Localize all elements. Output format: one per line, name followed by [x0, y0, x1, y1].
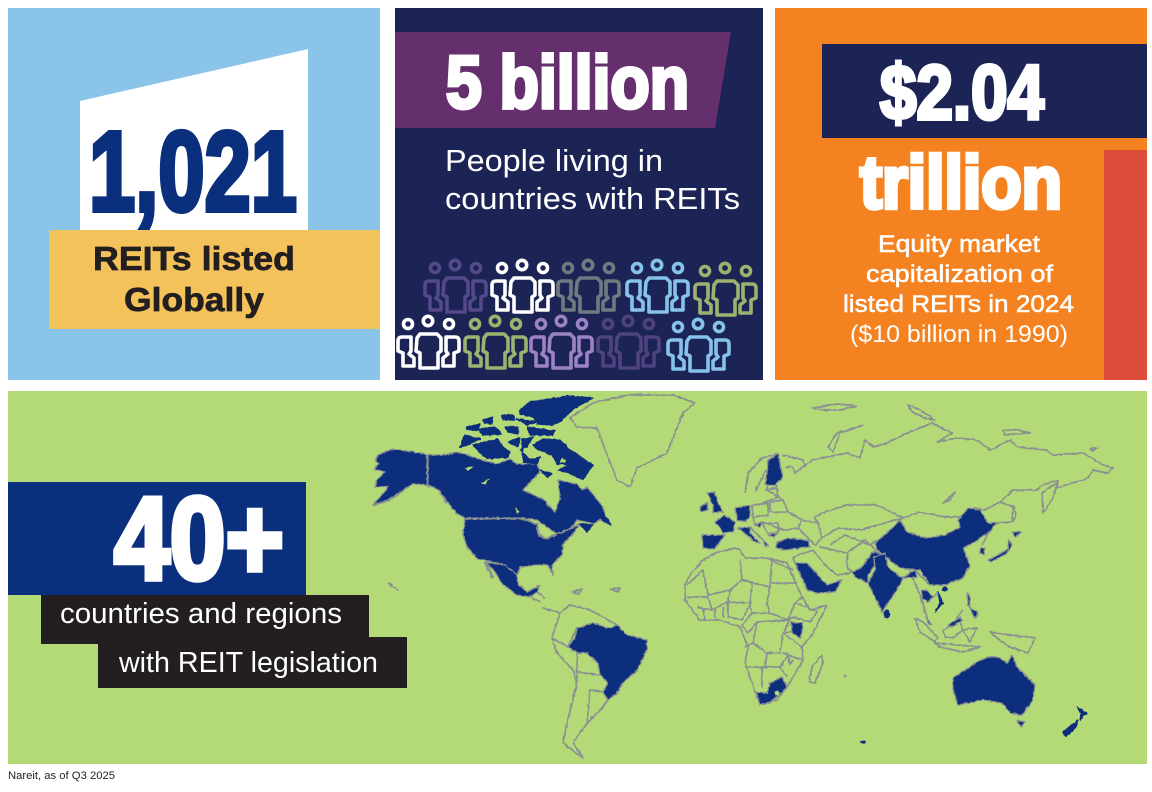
stat: 40+: 40+ — [114, 473, 284, 604]
text: equity market capitalization: Equity market — [878, 231, 1040, 258]
blue banner — [8, 482, 306, 595]
text: equity market capitalization: capitalization of — [866, 261, 1053, 288]
text: equity market capitalization — [843, 231, 1074, 348]
panel: world map — [8, 391, 1147, 764]
black label: with REIT legislation: with REIT legislation — [118, 647, 378, 679]
callout: 40+ countries and regions — [8, 473, 407, 688]
stat: 5 billion: 5 billion — [446, 41, 689, 124]
map: inland waters — [465, 458, 780, 696]
text: equity market capitalization: ($10 billion in 1990) — [850, 321, 1068, 348]
text: People living in countries with REITs: countries with REITs — [445, 181, 740, 216]
stat: $2.04: $2.04 — [880, 50, 1044, 136]
panel: $2.04 trillion — [775, 8, 1147, 380]
panel: REITs listed globally — [8, 8, 380, 380]
black label: countries and regions: countries and regions — [60, 598, 342, 630]
red side bar — [1104, 150, 1147, 380]
map: REIT countries — [373, 449, 1035, 727]
label: REITs listed Globally: Globally — [124, 281, 265, 318]
icon: white building — [80, 49, 308, 231]
purple banner — [395, 32, 731, 128]
source note: Nareit, as of Q3 2025 — [8, 770, 115, 782]
text: equity market capitalization: listed REITs in 2024 — [843, 291, 1074, 318]
map: arctic and small REIT territories — [460, 396, 1087, 743]
icons: groups of people — [398, 260, 756, 371]
text: People living in countries with REITs: People living in — [445, 143, 663, 178]
black label: with REIT legislation — [98, 637, 407, 688]
label: REITs listed Globally — [93, 240, 295, 318]
map: countries and outlines — [373, 395, 1113, 758]
panel: 5 billion people — [395, 8, 763, 380]
navy banner — [822, 44, 1147, 138]
map: country outlines — [373, 395, 1113, 758]
stat: trillion: trillion — [860, 141, 1062, 224]
label: REITs listed Globally: REITs listed — [93, 240, 295, 277]
yellow label band — [49, 230, 380, 329]
stat: 1,021: 1,021 — [89, 108, 297, 234]
black label: countries and regions — [41, 595, 369, 644]
text: People living in countries with REITs — [445, 143, 740, 216]
